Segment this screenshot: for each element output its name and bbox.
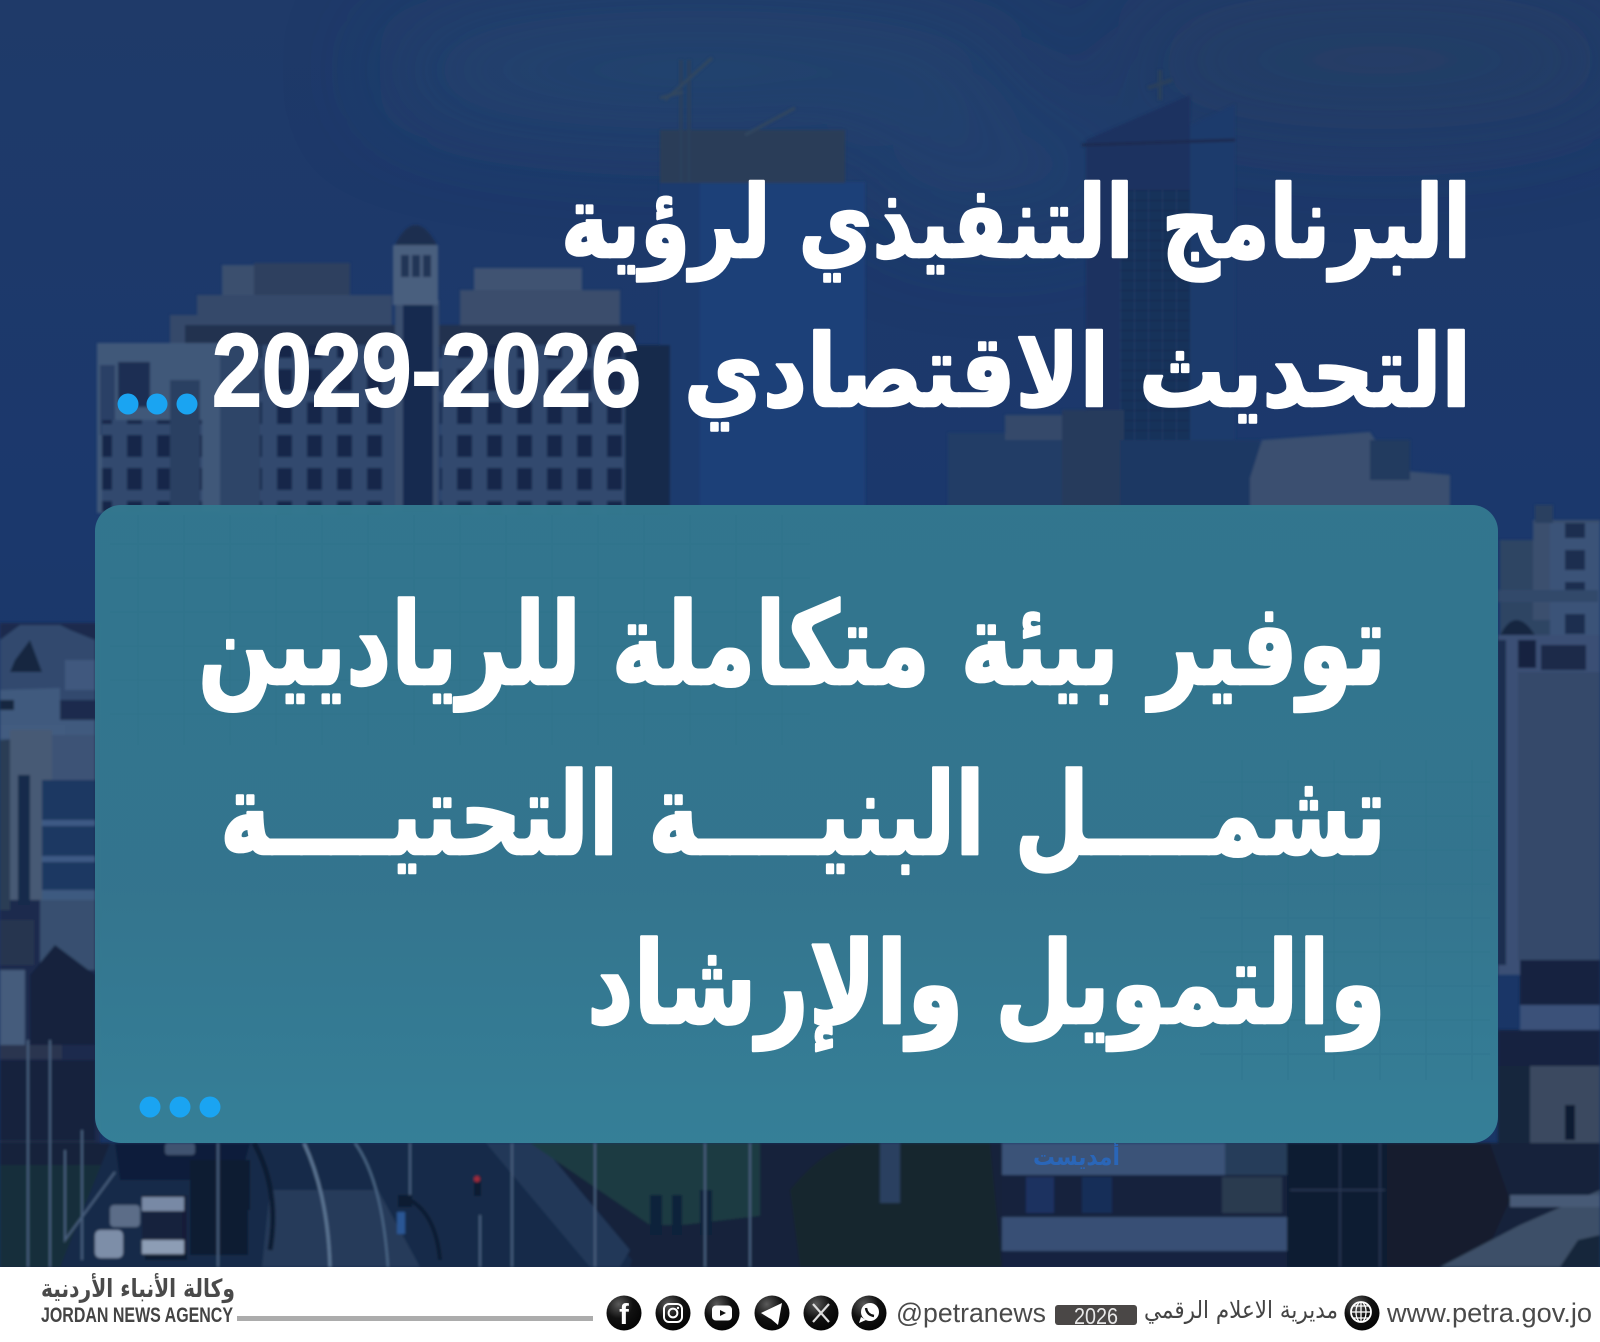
- hotel: [222, 265, 350, 335]
- media directorate text: مديرية الاعلام الرقمي: [1144, 1296, 1338, 1324]
- title years: 2029-2026: [212, 313, 641, 429]
- cars and bus: [145, 1205, 187, 1260]
- icon: youtube: [704, 1296, 740, 1330]
- social handle: @petranews: [896, 1298, 1046, 1328]
- icon: x: [804, 1296, 838, 1330]
- website: www.petra.gov.jo: [1386, 1298, 1592, 1328]
- year badge: 2026: [1074, 1303, 1118, 1329]
- icon: globe: [1344, 1296, 1380, 1330]
- tall tower: [1086, 95, 1190, 512]
- panel: main message: [95, 505, 1498, 1143]
- icon: telegram: [754, 1296, 790, 1330]
- left hillside and buildings: [0, 623, 100, 1273]
- street poles: [28, 1040, 750, 1267]
- icon: facebook: f: [619, 1299, 629, 1331]
- year badge: [1055, 1303, 1137, 1329]
- agency logo: وكالة الأنباء الأردنية: [41, 1273, 235, 1304]
- title line 2: التحديث الاقتصادي: [684, 313, 1471, 430]
- agency logo: JORDAN NEWS AGENCY: [41, 1304, 233, 1327]
- grey divider bar: [237, 1316, 593, 1321]
- traffic light: [474, 1176, 481, 1196]
- agency logo: [41, 1273, 235, 1327]
- footer: [0, 1267, 1600, 1342]
- trees: [790, 1143, 1002, 1267]
- right buildings: [1500, 540, 1600, 640]
- icon: whatsapp: [852, 1296, 886, 1330]
- construction tower: [660, 182, 865, 512]
- icon: facebook: [606, 1296, 642, 1331]
- sign text on building: أمديست: [1033, 1141, 1120, 1171]
- message line 3: والتمويل والإرشاد: [587, 917, 1386, 1051]
- icon: instagram: [656, 1296, 690, 1330]
- title: [212, 164, 1471, 430]
- title dots: [118, 394, 198, 414]
- rock slope: [1440, 1190, 1600, 1267]
- lower strip: [0, 1143, 1600, 1268]
- amideast building: [1002, 1143, 1287, 1175]
- panel dots: [140, 1096, 220, 1118]
- lower office blocks: [948, 433, 1063, 513]
